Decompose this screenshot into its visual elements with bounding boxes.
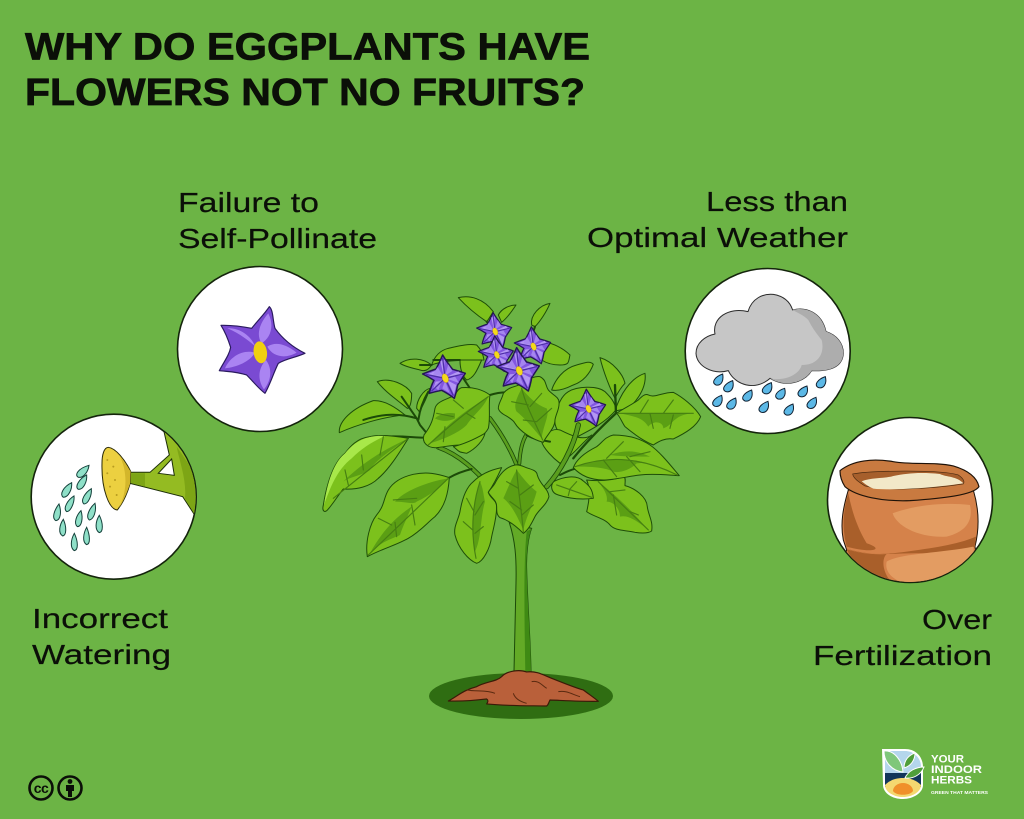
icon: rain drops	[713, 374, 826, 415]
label: failure to self-pollinate: Failure to	[178, 187, 319, 218]
icon circle: fertilizer sack	[828, 418, 992, 590]
foliage	[323, 297, 701, 563]
icon circle: rain cloud	[685, 268, 850, 434]
leaf: middle centre	[498, 377, 559, 442]
branches	[363, 322, 616, 487]
label: over fertilization: Fertilization	[813, 640, 992, 671]
icon: fertilizer sack	[840, 460, 979, 590]
title: FLOWERS NOT NO FRUITS?	[25, 72, 585, 114]
leaf: bottom centre	[488, 465, 549, 533]
label: incorrect watering: Watering	[32, 639, 171, 670]
leaf: right large	[573, 435, 679, 480]
title	[25, 26, 590, 114]
label: over fertilization	[813, 604, 992, 671]
stem	[509, 523, 532, 672]
icon circle: watering can	[31, 414, 200, 579]
label: less than optimal weather	[587, 186, 848, 253]
logo: your indoor herbs: GREEN THAT MATTERS	[931, 790, 988, 795]
label: failure to self-pollinate: Self-Pollinate	[178, 223, 377, 254]
icon: cloud	[696, 294, 843, 386]
icon: cc: cc	[34, 780, 49, 796]
leaf: far left with highlight	[323, 435, 408, 511]
label: failure to self-pollinate	[178, 187, 377, 254]
logo: your indoor herbs: HERBS	[931, 774, 972, 786]
label: incorrect watering: Incorrect	[32, 603, 168, 634]
leaf veins: upper right	[618, 400, 693, 428]
leaf: lower centre left	[455, 468, 502, 563]
label: incorrect watering	[32, 603, 171, 670]
leaf: lower left	[367, 473, 449, 557]
label: less than optimal weather: Less than	[706, 186, 848, 217]
title: WHY DO EGGPLANTS HAVE	[25, 26, 590, 68]
creative commons icons	[30, 776, 82, 800]
icon circle: flower	[178, 266, 342, 432]
soil mound	[448, 671, 598, 706]
logo emblem	[882, 749, 924, 799]
label: less than optimal weather: Optimal Weather	[587, 222, 848, 253]
label: over fertilization: Over	[922, 604, 992, 635]
back leaves	[339, 297, 701, 533]
logo: your indoor herbs	[882, 749, 988, 799]
icon: water drops	[54, 465, 102, 551]
icon: purple flower	[219, 307, 305, 393]
flowers	[423, 313, 606, 426]
icon: attribution	[58, 776, 82, 800]
ground shadow	[429, 673, 613, 719]
logo: your indoor herbs: INDOOR	[931, 764, 982, 776]
logo wordmark: YOUR	[931, 754, 964, 766]
eggplant plant	[323, 297, 701, 706]
icon: watering can	[102, 432, 200, 515]
leaf: middle left	[423, 387, 490, 453]
